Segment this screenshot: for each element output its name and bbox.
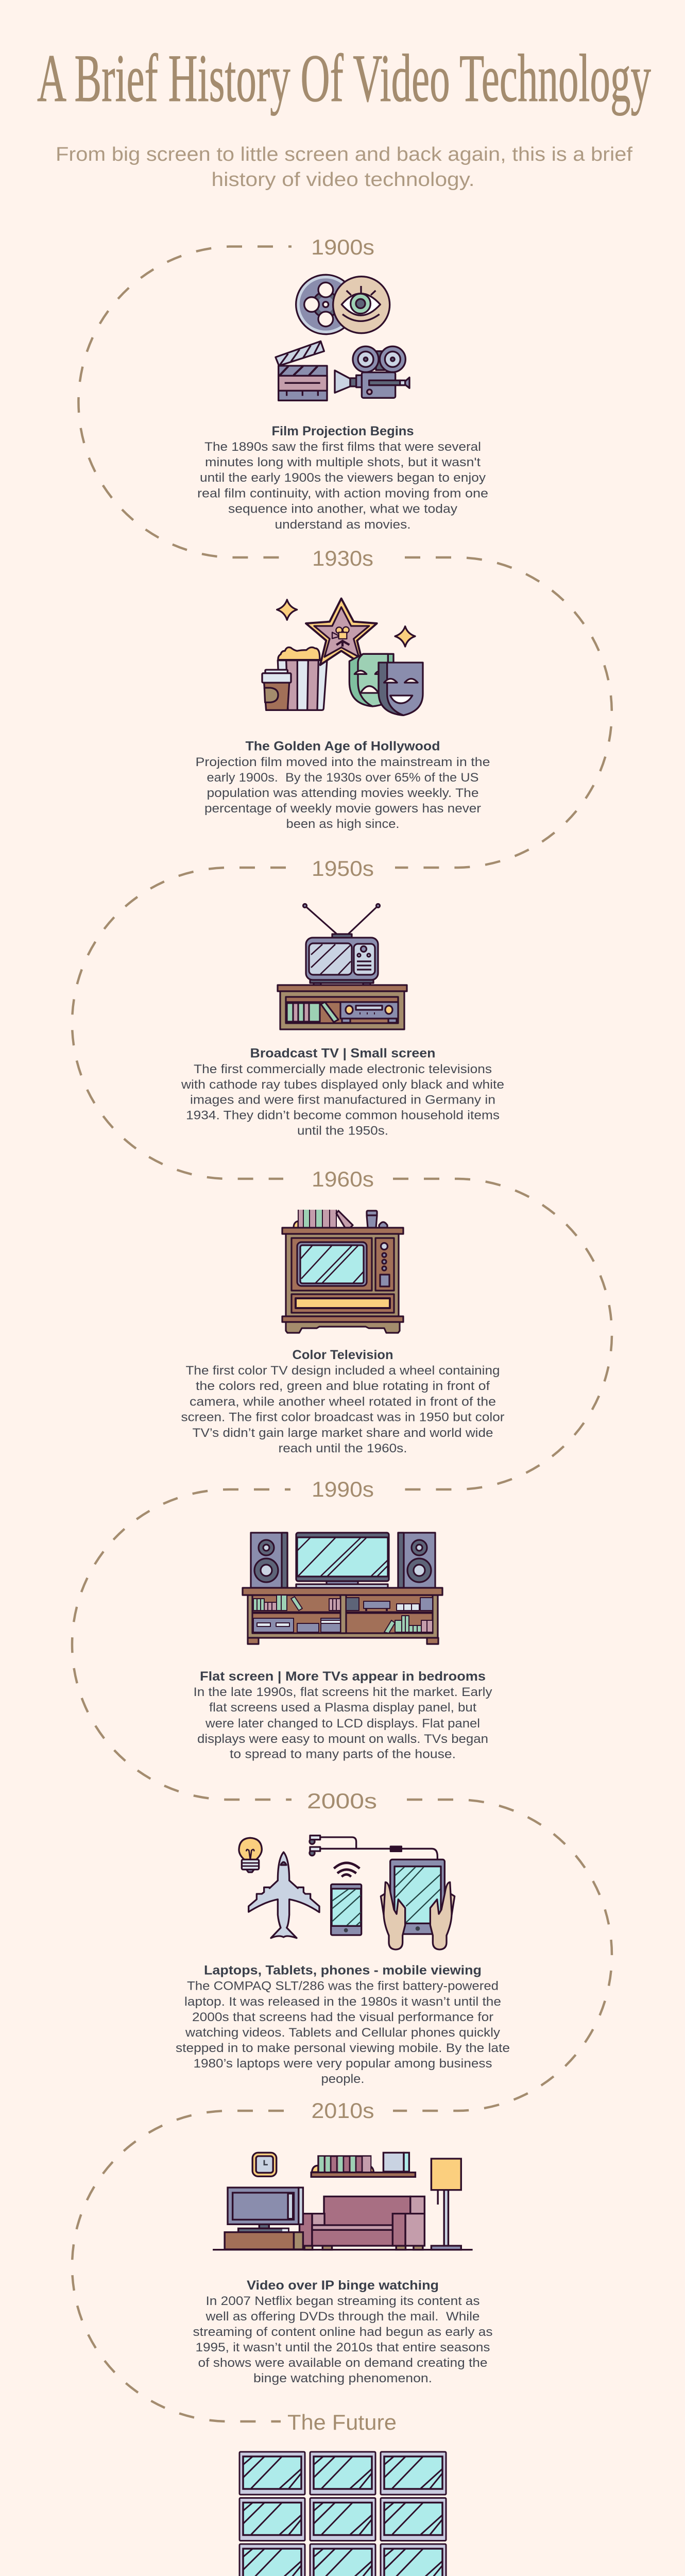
body text: In 2007 Netflix began streaming its content as bbox=[206, 2294, 480, 2308]
body text: 1934. They didn’t become common household items bbox=[186, 1109, 500, 1122]
body text: In the late 1990s, flat screens hit the market. Early bbox=[194, 1685, 492, 1699]
body text: the colors red, green and blue rotating in front of bbox=[196, 1379, 490, 1393]
body text bbox=[193, 2294, 492, 2385]
body text bbox=[196, 755, 490, 831]
year label: 1900s: 1900s bbox=[311, 235, 374, 259]
body text: stepped in to make personal viewing mobile. By the late bbox=[176, 2041, 510, 2055]
body text bbox=[197, 440, 488, 532]
panel: 1930s bbox=[196, 546, 490, 831]
heading: Color Television bbox=[293, 1348, 393, 1362]
panel: 1960s bbox=[181, 1167, 505, 1455]
body text: early 1900s. By the 1930s over 65% of the US bbox=[207, 771, 479, 785]
body text: people. bbox=[321, 2072, 365, 2086]
body text: Projection film moved into the mainstream in the bbox=[196, 755, 490, 769]
body text: TV’s didn’t gain large market share and world wide bbox=[193, 1426, 493, 1440]
body text: understand as movies. bbox=[275, 518, 411, 532]
body text bbox=[194, 1685, 492, 1761]
icon: colour television console bbox=[282, 1210, 403, 1333]
panel: 1990s bbox=[194, 1477, 492, 1761]
icon: living room with TV, sofa and lamp bbox=[213, 2153, 473, 2250]
icon: flat screen with speakers on media unit bbox=[243, 1533, 442, 1644]
body text: minutes long with multiple shots, but it wasn't bbox=[205, 455, 481, 469]
body text: streaming of content online had begun as early as bbox=[193, 2325, 492, 2339]
body text: camera, while another wheel rotated in front of the bbox=[190, 1395, 496, 1409]
body text bbox=[176, 1979, 510, 2086]
subtitle: history of video technology. bbox=[211, 169, 475, 191]
icon: bulb, plane, phone, tablet and earphones bbox=[239, 1836, 455, 1950]
body text bbox=[181, 1062, 504, 1138]
body text: well as offering DVDs through the mail. While bbox=[205, 2310, 480, 2324]
year label: The Future: The Future bbox=[287, 2410, 397, 2434]
heading: Laptops, Tablets, phones - mobile viewing bbox=[204, 1963, 482, 1977]
body text: The first commercially made electronic televisions bbox=[194, 1062, 492, 1076]
body text: watching videos. Tablets and Cellular phones quickly bbox=[185, 2026, 501, 2040]
body text: reach until the 1960s. bbox=[278, 1442, 407, 1455]
body text: sequence into another, what we today bbox=[228, 502, 458, 516]
body text: binge watching phenomenon. bbox=[253, 2371, 432, 2385]
icon: video wall of nine screens bbox=[239, 2452, 446, 2576]
heading: Flat screen | More TVs appear in bedrooms bbox=[200, 1669, 486, 1684]
year label: 1990s: 1990s bbox=[312, 1477, 374, 1501]
year label: 1950s: 1950s bbox=[312, 856, 374, 880]
body text: percentage of weekly movie gowers has never bbox=[204, 802, 481, 816]
body text: been as high since. bbox=[286, 817, 400, 831]
body text: The first color TV design included a wheel containing bbox=[185, 1364, 500, 1378]
year label: 1960s: 1960s bbox=[312, 1167, 374, 1191]
panel: 2000s bbox=[176, 1789, 510, 2086]
body text: population was attending movies weekly. The bbox=[207, 786, 479, 800]
body text: until the early 1900s the viewers began to enjoy bbox=[200, 471, 486, 485]
heading: The Golden Age of Hollywood bbox=[245, 739, 440, 753]
body text: with cathode ray tubes displayed only black and white bbox=[181, 1078, 504, 1092]
body text: 1980’s laptops were very popular among business bbox=[194, 2057, 492, 2071]
subtitle: From big screen to little screen and back again, this is a brief bbox=[56, 144, 632, 165]
panel: 1950s bbox=[181, 856, 504, 1138]
panel: 1900s bbox=[197, 235, 488, 532]
body text: images and were first manufactured in Germany in bbox=[190, 1093, 495, 1107]
year label: 2000s: 2000s bbox=[307, 1789, 377, 1813]
panel: The Future bbox=[194, 2410, 492, 2576]
body text: laptop. It was released in the 1980s it wasn’t until the bbox=[184, 1995, 501, 2009]
body text: 1995, it wasn’t until the 2010s that entire seasons bbox=[196, 2341, 490, 2354]
body text: 2000s that screens had the visual performance for bbox=[192, 2010, 493, 2024]
subtitle bbox=[56, 144, 632, 191]
icon: star, popcorn, coffee and theatre masks bbox=[262, 599, 423, 715]
body text: The COMPAQ SLT/286 was the first battery-powered bbox=[187, 1979, 499, 1993]
body text: The 1890s saw the first films that were several bbox=[204, 440, 481, 454]
body text bbox=[181, 1364, 505, 1455]
body text: until the 1950s. bbox=[297, 1124, 388, 1138]
icon: film reel, eye, clapper and camera bbox=[276, 275, 409, 400]
body text: were later changed to LCD displays. Flat panel bbox=[205, 1717, 480, 1731]
body text: displays were easy to mount on walls. TVs began bbox=[197, 1732, 488, 1746]
heading: Broadcast TV | Small screen bbox=[250, 1046, 436, 1060]
body text: screen. The first color broadcast was in 1950 but color bbox=[181, 1411, 505, 1424]
panel: 2010s bbox=[193, 2098, 492, 2385]
body text: of shows were available on demand creating the bbox=[198, 2356, 487, 2370]
body text: real film continuity, with action moving from one bbox=[197, 486, 488, 501]
year label: 1930s: 1930s bbox=[312, 546, 373, 570]
body text: to spread to many parts of the house. bbox=[230, 1748, 456, 1761]
heading: Video over IP binge watching bbox=[247, 2278, 439, 2293]
heading: Film Projection Begins bbox=[272, 424, 414, 438]
dashed timeline path bbox=[72, 246, 612, 2421]
body text: flat screens used a Plasma display panel, but bbox=[209, 1701, 476, 1715]
icon: broadcast TV on cabinet bbox=[278, 904, 407, 1029]
year label: 2010s: 2010s bbox=[311, 2098, 374, 2123]
